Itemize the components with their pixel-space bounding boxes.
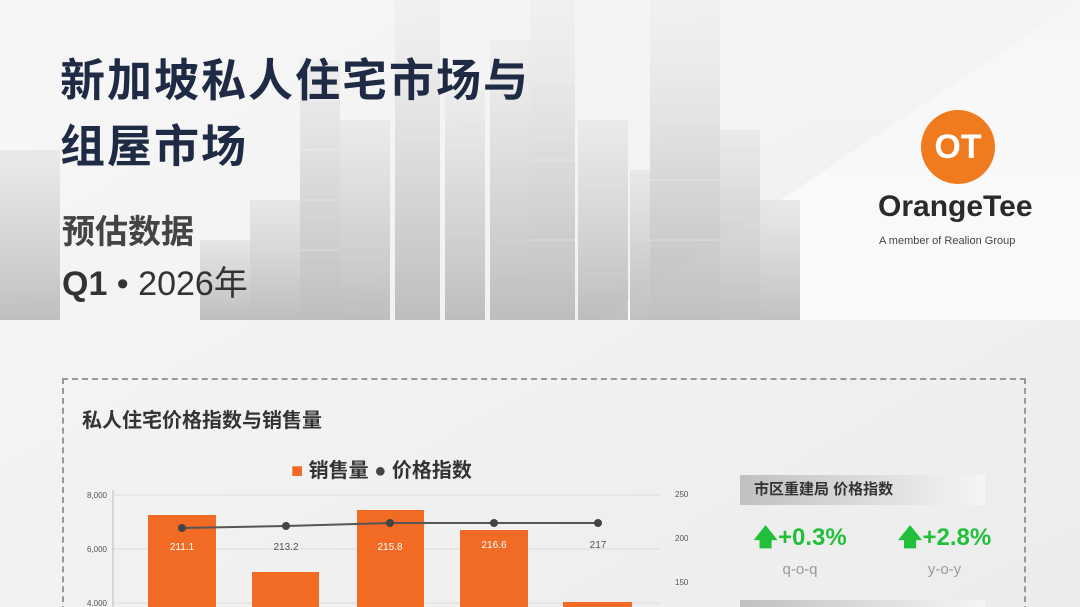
chart: 6,000 [87, 545, 108, 554]
chart: 211.1 [170, 542, 195, 553]
chart: 150 [675, 578, 689, 587]
logo [878, 110, 1032, 247]
chart: 215.8 [377, 542, 403, 553]
URA index header: 市区重建局 价格指数 [754, 481, 893, 498]
URA index header [740, 475, 985, 505]
stat: y-o-y [898, 524, 991, 578]
chart: 213.2 [273, 542, 299, 553]
chart: 217 [590, 540, 607, 551]
title [60, 55, 530, 172]
chart: 8,000 [87, 491, 108, 500]
stat: y-o-y: y-o-y [928, 561, 961, 578]
chart: 200 [675, 534, 689, 543]
brand name: OrangeTee [878, 190, 1032, 223]
stat: q-o-q [753, 524, 847, 578]
panel heading: 私人住宅价格指数与销售量 [82, 410, 322, 432]
subtitle: 预估数据 [62, 213, 194, 250]
icon: OT circle [921, 110, 995, 184]
legend: ■ 销售量 ● 价格指数 [291, 460, 472, 482]
tagline: A member of Realion Group [879, 235, 1015, 247]
icon: OT circle: OT [934, 128, 982, 166]
chart: 250 [675, 490, 689, 499]
panel: private residential [62, 378, 1026, 607]
title: 组屋市场 [60, 121, 248, 172]
second header [740, 600, 985, 607]
stat: q-o-q: q-o-q [782, 561, 818, 578]
stat: y-o-y: 🡅+2.8% [898, 524, 991, 551]
chart: 216.6 [481, 540, 507, 551]
title: 新加坡私人住宅市场与 [60, 55, 530, 106]
date: Q1 • 2026年 [62, 265, 248, 303]
stat: q-o-q: 🡅+0.3% [753, 524, 847, 551]
